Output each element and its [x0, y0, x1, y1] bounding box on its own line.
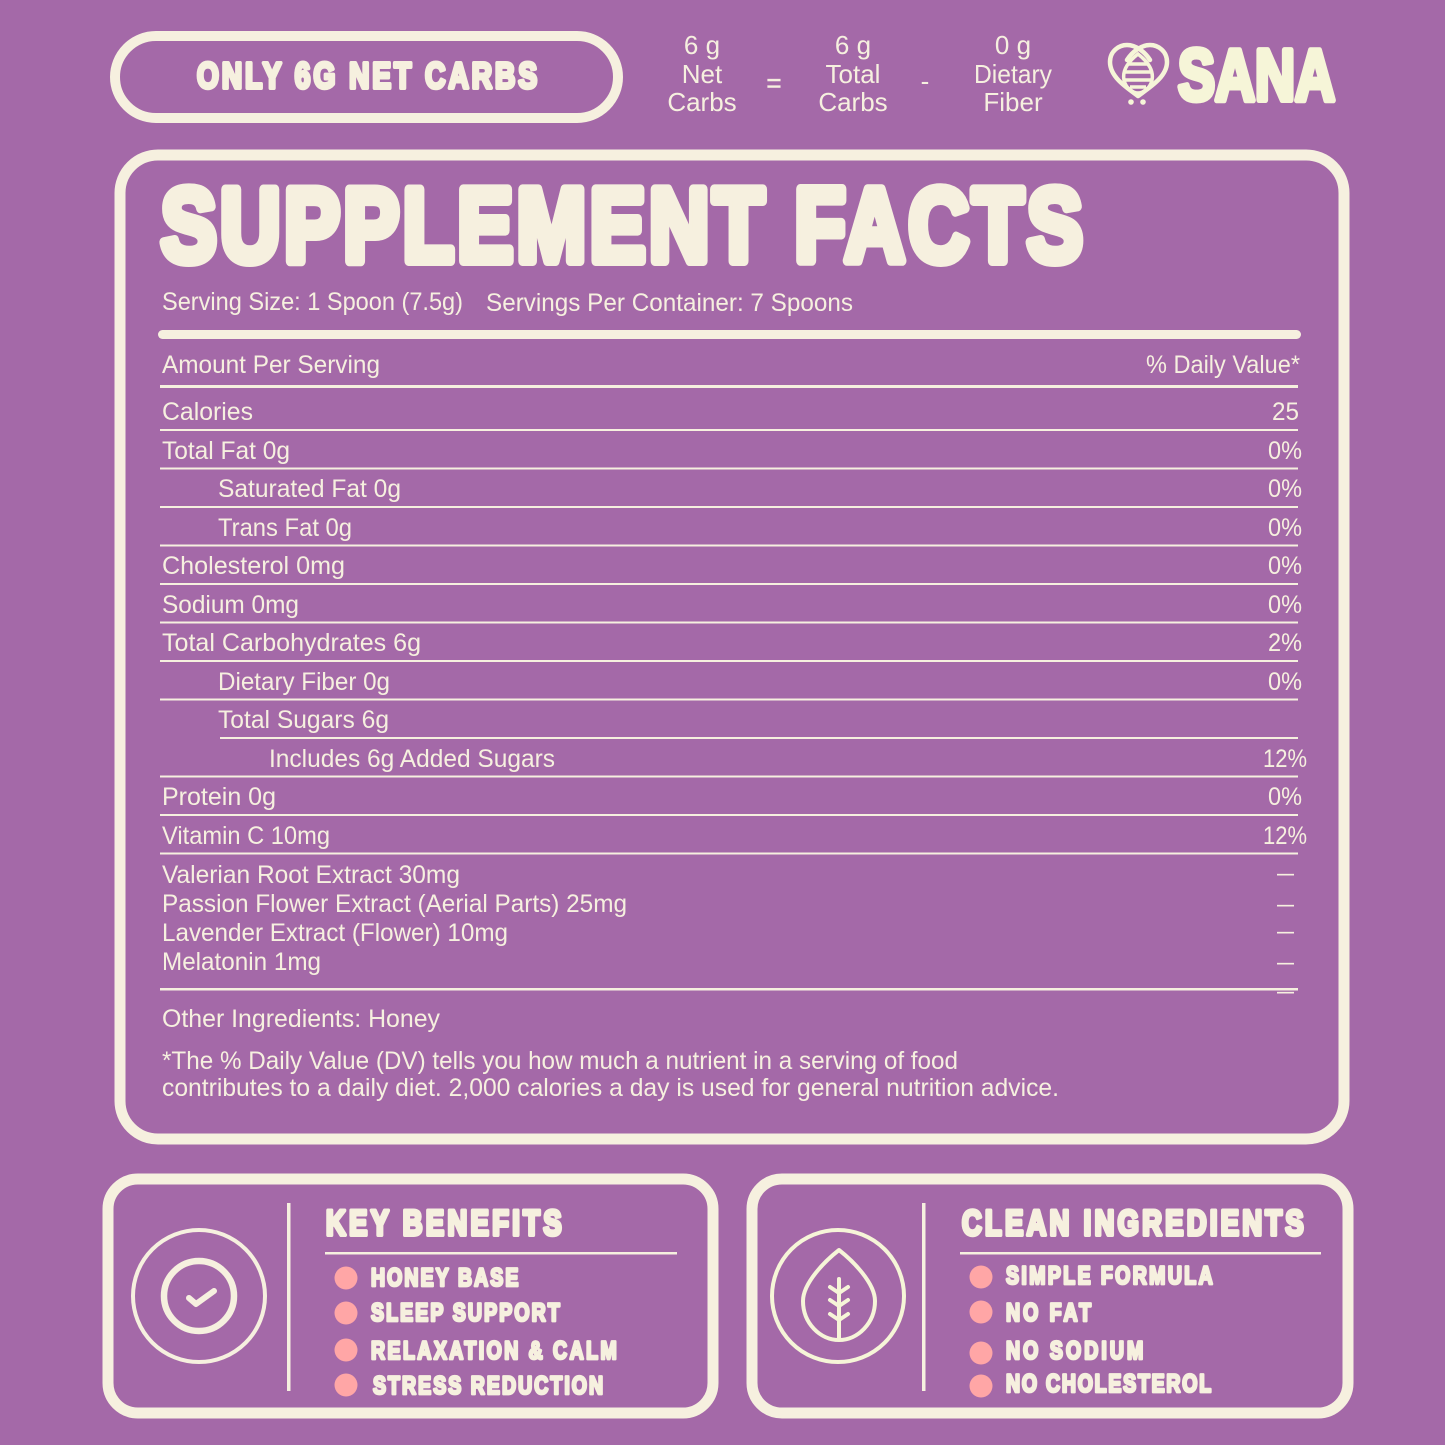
- botanical extracts list: Valerian Root Extract 30mg: [162, 861, 460, 889]
- nutrient rows: 0%: [1268, 668, 1302, 696]
- nutrient rows: 2%: [1268, 629, 1302, 657]
- nutrient rows: 0%: [1268, 552, 1302, 580]
- heading: key benefits: KEY BENEFITS: [326, 1204, 562, 1243]
- nutrient rows: Total Carbohydrates 6g: [162, 629, 421, 657]
- net carbs equation: 0 g: [995, 30, 1031, 60]
- nutrient rows: Vitamin C 10mg: [162, 822, 330, 850]
- serving information: [162, 288, 853, 317]
- net carbs equation: [667, 30, 1052, 117]
- nutrient rows: 0%: [1268, 514, 1302, 542]
- net carbs equation: Net: [682, 59, 723, 89]
- heading: supplement facts: SUPPLEMENT FACTS: [161, 167, 1083, 283]
- daily value footnote: [162, 1047, 1059, 1102]
- nutrient rows: 12%: [1263, 745, 1307, 773]
- ingredients list: NO SODIUM: [1006, 1337, 1143, 1365]
- logo: Sana bee heart: [1110, 36, 1335, 116]
- nutrient rows: Total Fat 0g: [162, 437, 290, 465]
- net carbs equation: 6 g: [835, 30, 871, 60]
- panel: clean ingredients: [752, 1179, 1348, 1413]
- nutrient rows: 0%: [1268, 437, 1302, 465]
- serving information: Servings Per Container: 7 Spoons: [486, 289, 853, 317]
- net carbs equation: Carbs: [818, 87, 888, 117]
- nutrient rows: Sodium 0mg: [162, 591, 299, 619]
- nutrient rows: Total Sugars 6g: [218, 706, 389, 734]
- badge: only 6g net carbs: [115, 36, 618, 118]
- botanical extracts list: Lavender Extract (Flower) 10mg: [162, 919, 508, 947]
- ingredients list: SIMPLE FORMULA: [1006, 1262, 1213, 1290]
- nutrient rows: [160, 398, 1307, 854]
- nutrient rows: 25: [1272, 398, 1299, 426]
- panel: key benefits: [108, 1179, 713, 1413]
- icon: leaf badge: [772, 1230, 904, 1362]
- benefits list: HONEY BASE: [371, 1264, 518, 1292]
- botanical extracts list: Melatonin 1mg: [162, 948, 321, 976]
- nutrient rows: Trans Fat 0g: [218, 514, 352, 542]
- net carbs equation: =: [766, 68, 782, 98]
- nutrient rows: Saturated Fat 0g: [218, 475, 401, 503]
- net carbs equation: Carbs: [667, 87, 737, 117]
- net carbs equation: -: [921, 66, 929, 96]
- ingredients list: [970, 1262, 1213, 1398]
- daily value footnote: contributes to a daily diet. 2,000 calories a day is used for general nutrition advice.: [162, 1074, 1059, 1102]
- badge: only 6g net carbs: ONLY 6G NET CARBS: [197, 56, 537, 96]
- ingredients list: NO CHOLESTEROL: [1006, 1370, 1211, 1398]
- benefits list: SLEEP SUPPORT: [371, 1299, 560, 1327]
- table header: % Daily Value*: [1146, 351, 1300, 379]
- botanical extracts list: —: [1277, 977, 1294, 1005]
- benefits list: [334, 1264, 617, 1400]
- nutrient rows: 0%: [1268, 783, 1302, 811]
- botanical extracts list: [162, 859, 1294, 1005]
- nutrient rows: 0%: [1268, 591, 1302, 619]
- botanical extracts list: —: [1277, 917, 1294, 945]
- panel: supplement facts: [120, 155, 1344, 1139]
- net carbs equation: Fiber: [983, 87, 1043, 117]
- benefits list: STRESS REDUCTION: [373, 1372, 603, 1400]
- icon: check badge: [133, 1230, 265, 1362]
- botanical extracts list: —: [1277, 859, 1294, 887]
- nutrient rows: Protein 0g: [162, 783, 276, 811]
- botanical extracts list: —: [1277, 890, 1294, 918]
- nutrient rows: Dietary Fiber 0g: [218, 668, 390, 696]
- benefits list: RELAXATION & CALM: [371, 1337, 617, 1365]
- table header: [162, 351, 1300, 379]
- net carbs equation: 6 g: [684, 30, 720, 60]
- heading: clean ingredients: CLEAN INGREDIENTS: [962, 1204, 1304, 1243]
- logo: Sana bee heart: SANA: [1178, 36, 1335, 116]
- nutrient rows: 0%: [1268, 475, 1302, 503]
- net carbs equation: Total: [826, 59, 880, 89]
- net carbs equation: Dietary: [974, 59, 1052, 89]
- nutrient rows: Calories: [162, 398, 253, 426]
- botanical extracts list: Passion Flower Extract (Aerial Parts) 25mg: [162, 890, 627, 918]
- daily value footnote: *The % Daily Value (DV) tells you how much a nutrient in a serving of food: [162, 1047, 958, 1075]
- nutrient rows: Cholesterol 0mg: [162, 552, 345, 580]
- nutrient rows: Includes 6g Added Sugars: [269, 745, 555, 773]
- table header: Amount Per Serving: [162, 351, 380, 379]
- ingredients list: NO FAT: [1006, 1299, 1091, 1327]
- serving information: Serving Size: 1 Spoon (7.5g): [162, 288, 463, 316]
- botanical extracts list: —: [1277, 948, 1294, 976]
- nutrient rows: 12%: [1263, 822, 1307, 850]
- other ingredients: Other Ingredients: Honey: [162, 1005, 440, 1033]
